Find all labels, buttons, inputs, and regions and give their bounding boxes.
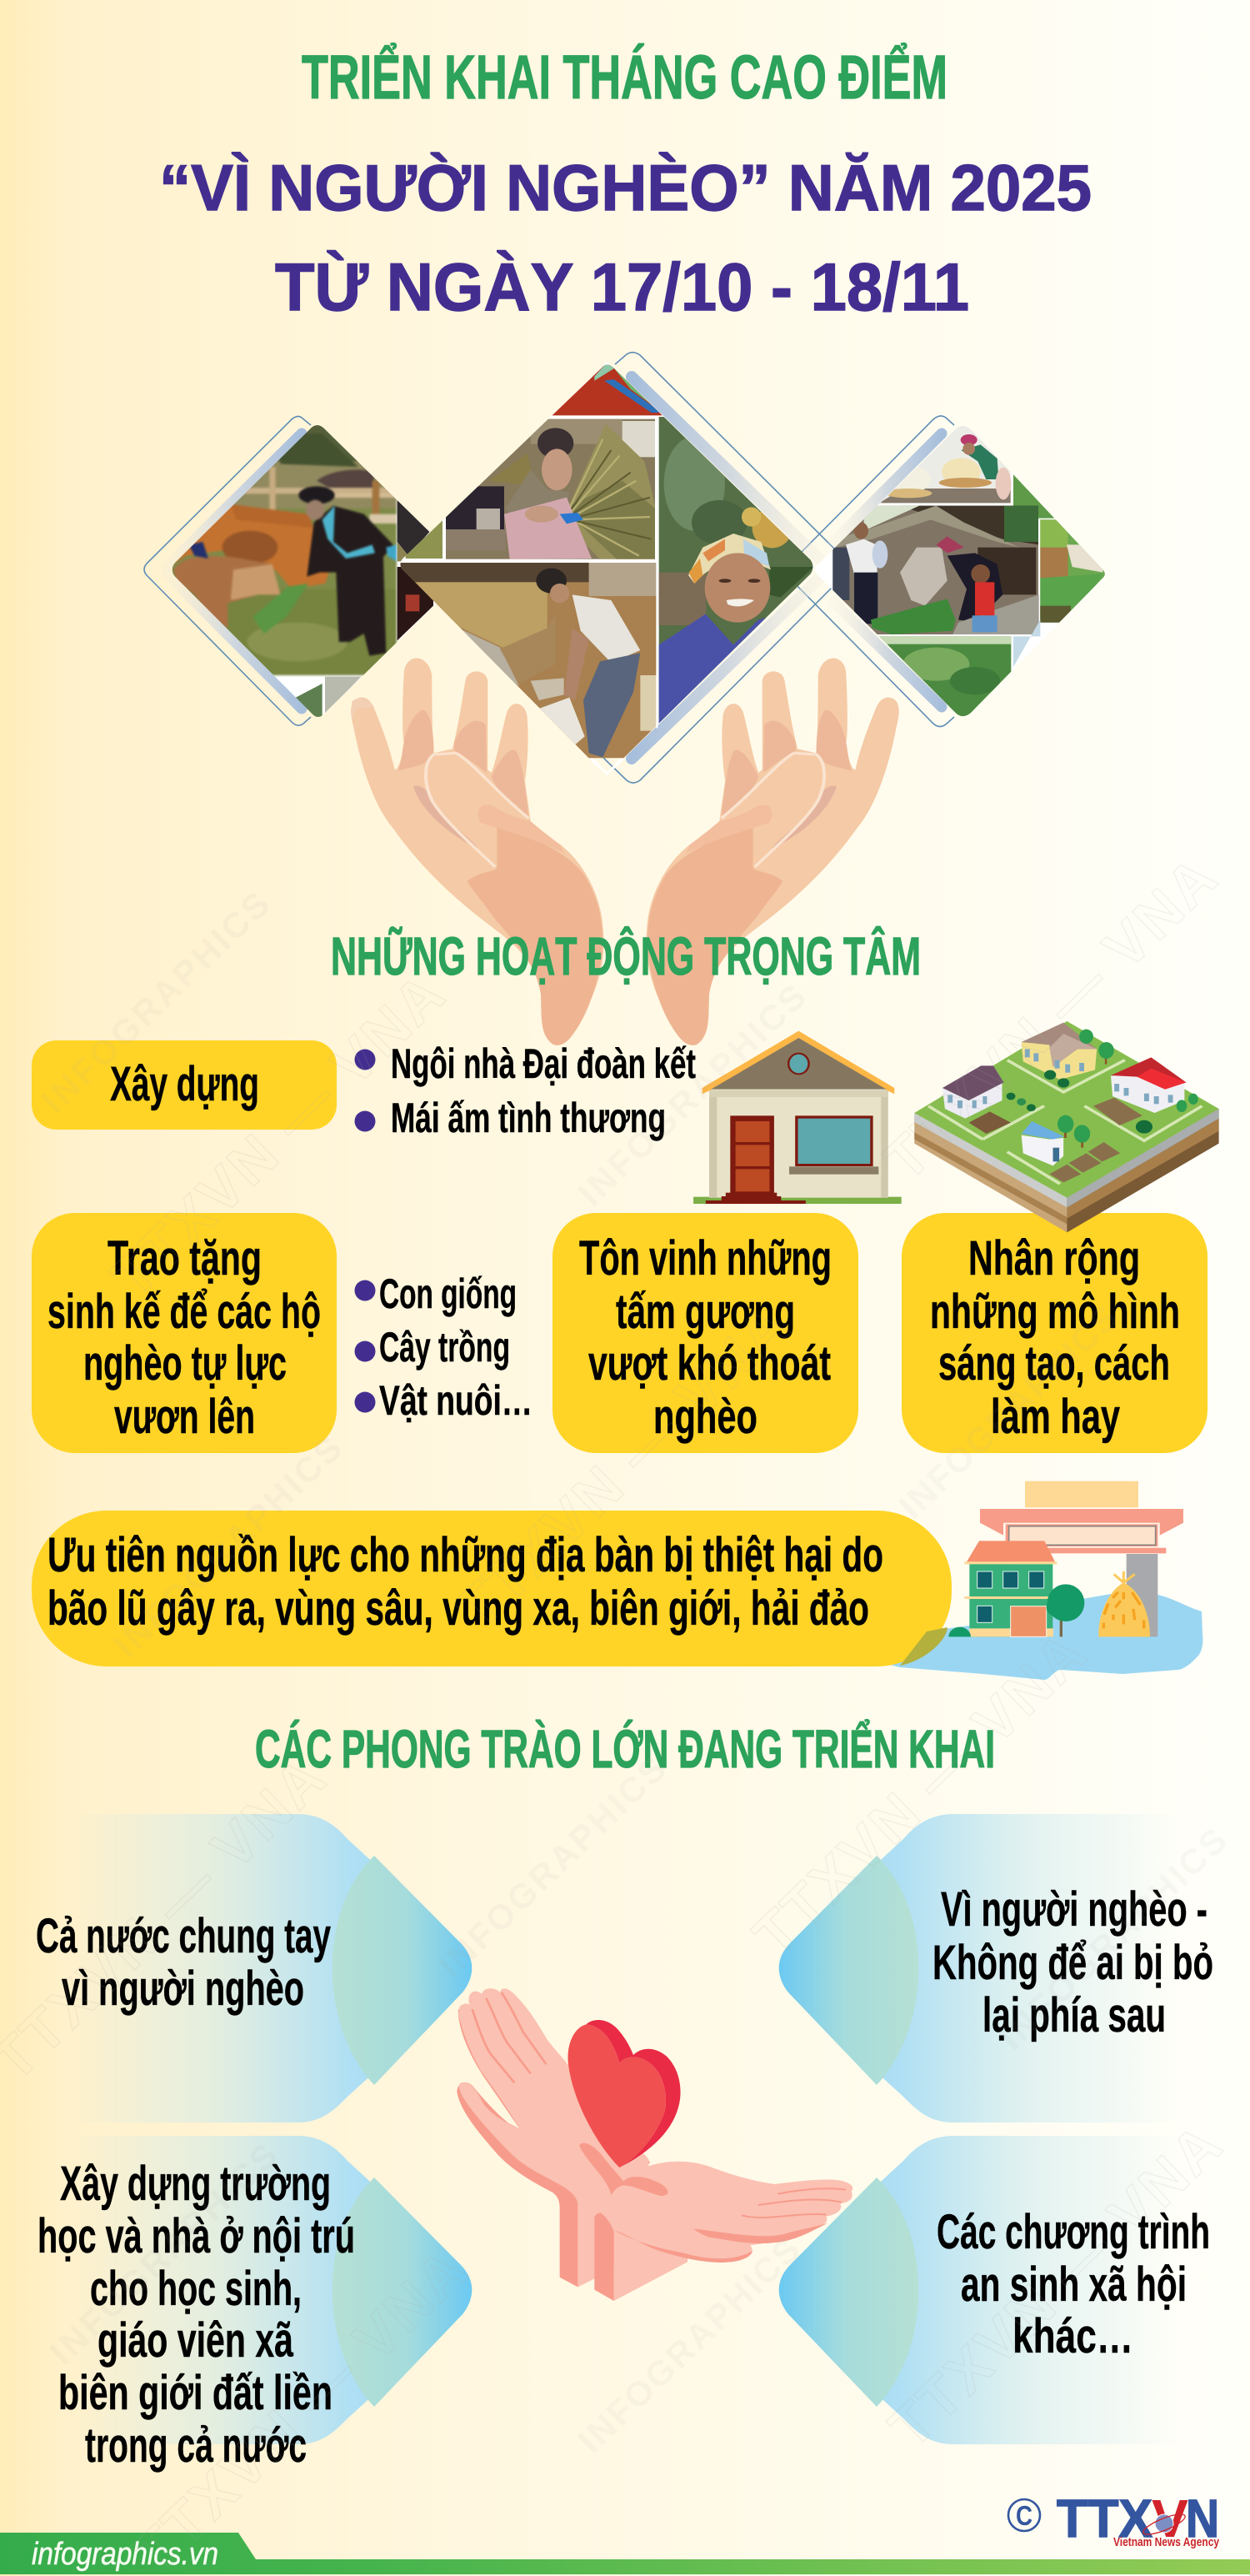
icon: isometric village [914,1021,1219,1232]
title line 3: TỪ NGÀY 17/10 - 18/11 [275,249,969,325]
panel: vì người nghèo: lại phía sau [982,1988,1166,2042]
text: INFOGRAPHICS [431,1749,673,1985]
panel: các chương trình an sinh [779,2136,1210,2444]
logo: TTXVN Vietnam News Agency: N [1186,2488,1219,2548]
photo part: smiling woman [659,417,818,728]
panel: xây dựng trường học: trong cả nước [85,2418,307,2473]
title [159,43,1092,325]
text: TTXVN — VNA [444,1293,801,1641]
text: TTXVN — VNA [741,1620,1098,1968]
panel: các chương trình an sinh: khác… [1012,2309,1133,2363]
panel: nhân rộng: Nhân rộng [968,1231,1140,1285]
photo: right diamond, family with buffalo [808,423,1114,723]
panel: xây dựng [32,1040,337,1130]
panel: xây dựng trường học: cho học sinh, [90,2262,302,2316]
panel: nhân rộng [902,1213,1208,1453]
panel: nhân rộng: làm hay [991,1390,1120,1444]
panel: tôn vinh: nghèo [653,1390,758,1444]
logo: TTXVN Vietnam News Agency: TTX [1057,2488,1152,2548]
logo: TTXVN Vietnam News Agency: Vietnam News Agency [1113,2536,1219,2549]
text: INFOGRAPHICS [34,885,277,1120]
text: INFOGRAPHICS [42,2136,285,2372]
panel: cả nước chung tay: Cả nước chung tay [36,1909,331,1963]
panel: xây dựng trường học [38,2136,472,2473]
icon: village gate with house and haystack [948,1481,1183,1636]
list: construction bullets: Ngôi nhà Đại đoàn kết [391,1040,696,1087]
list: construction bullets: Mái ấm tình thương [391,1095,666,1141]
panel: xây dựng trường học: học và nhà ở nội trú [38,2209,355,2263]
text: INFOGRAPHICS [571,977,813,1213]
panel: vì người nghèo [779,1814,1213,2122]
panel: xây dựng trường học: giáo viên xã [98,2313,294,2368]
panel: trao tặng sinh kế: Trao tặng [108,1231,262,1285]
panel: cả nước chung tay [36,1814,472,2122]
panel: ưu tiên nguồn lực: bão lũ gây ra, vùng sâu, vùng xa, biên giới, hải đảo [48,1581,869,1636]
list: livelihood bullets [355,1270,532,1424]
house: yellow [1022,1023,1097,1080]
title line 2: “VÌ NGƯỜI NGHÈO” NĂM 2025 [159,151,1092,224]
panel: xây dựng trường học: Xây dựng trường [60,2157,331,2211]
icon: hands holding a heart [457,1988,852,2301]
list: livelihood bullets: Con giống [379,1270,517,1317]
title line 1: TRIỂN KHAI THÁNG CAO ĐIỂM [302,43,948,112]
text: TTXVN — VNA [872,844,1228,1193]
panel: ưu tiên nguồn lực: Ưu tiên nguồn lực cho những địa bàn bị thiệt hại do [48,1528,883,1582]
panel: xây dựng trường học: biên giới đất liền [58,2366,332,2420]
icon: flooded water [883,1594,1202,1680]
icon: left hand [351,659,604,1045]
footer bar [0,2533,1250,2574]
panel: xây dựng: Xây dựng [110,1057,259,1111]
icon: house [693,1031,902,1204]
tree [1047,1584,1084,1636]
website label: infographics.vn [32,2537,218,2572]
house: purple roof [942,1065,1004,1119]
haystack [1098,1571,1150,1636]
panel: tôn vinh: tấm gương [616,1285,795,1339]
text: INFOGRAPHICS [992,1821,1234,2057]
panel: tôn vinh [552,1213,858,1453]
panel: ưu tiên nguồn lực [32,1511,952,1666]
icon: right hand [646,659,899,1045]
house: red roof [1111,1057,1186,1113]
diamond frame outlines and bars [144,353,954,783]
icon: two open hands [351,659,899,1045]
panel: cả nước chung tay: vì người nghèo [62,1962,304,2016]
logo: TTXVN Vietnam News Agency: V [1152,2488,1188,2548]
panel: trao tặng sinh kế: vươn lên [114,1390,255,1444]
text: TTXVN — VNA [99,961,456,1310]
panel: trao tặng sinh kế: sinh kế để các hộ [48,1285,321,1339]
copyright symbol: C [1016,2500,1032,2531]
list: livelihood bullets: Vật nuôi… [379,1377,532,1424]
logo: TTXVN Vietnam News Agency [1008,2488,1219,2549]
icon: heart [568,2020,681,2168]
text: INFOGRAPHICS [571,2230,808,2460]
photo part: pig farmer [400,563,657,760]
panel: tôn vinh: Tôn vinh những [579,1231,832,1285]
panel: trao tặng sinh kế [32,1213,337,1453]
text: INFOGRAPHICS [892,1298,1125,1526]
panel: trao tặng sinh kế: nghèo tự lực [83,1336,287,1391]
trees [1007,1030,1198,1148]
photo: centre diamond, broom maker, pig farmer and smiling woman [398,358,818,775]
list: construction bullets [355,1040,696,1141]
text: TTXVN — VNA [877,2112,1233,2460]
house: blue roof [1022,1121,1064,1165]
house [964,1541,1057,1636]
text: TTXVN — VNA [122,2237,478,2576]
list: livelihood bullets: Cây trồng [379,1324,510,1371]
copyright symbol [1008,2499,1040,2531]
panel: tôn vinh: vượt khó thoát [588,1336,831,1391]
text: INFOGRAPHICS [107,1429,349,1665]
photo part: red table [552,365,662,415]
photo part: broom maker [446,419,655,559]
heading: những hoạt động trọng tâm: NHỮNG HOẠT ĐỘNG TRỌNG TÂM [331,925,921,986]
photo part: grass sliver [406,519,442,559]
photo: left diamond, farmer feeding cows [172,425,437,717]
